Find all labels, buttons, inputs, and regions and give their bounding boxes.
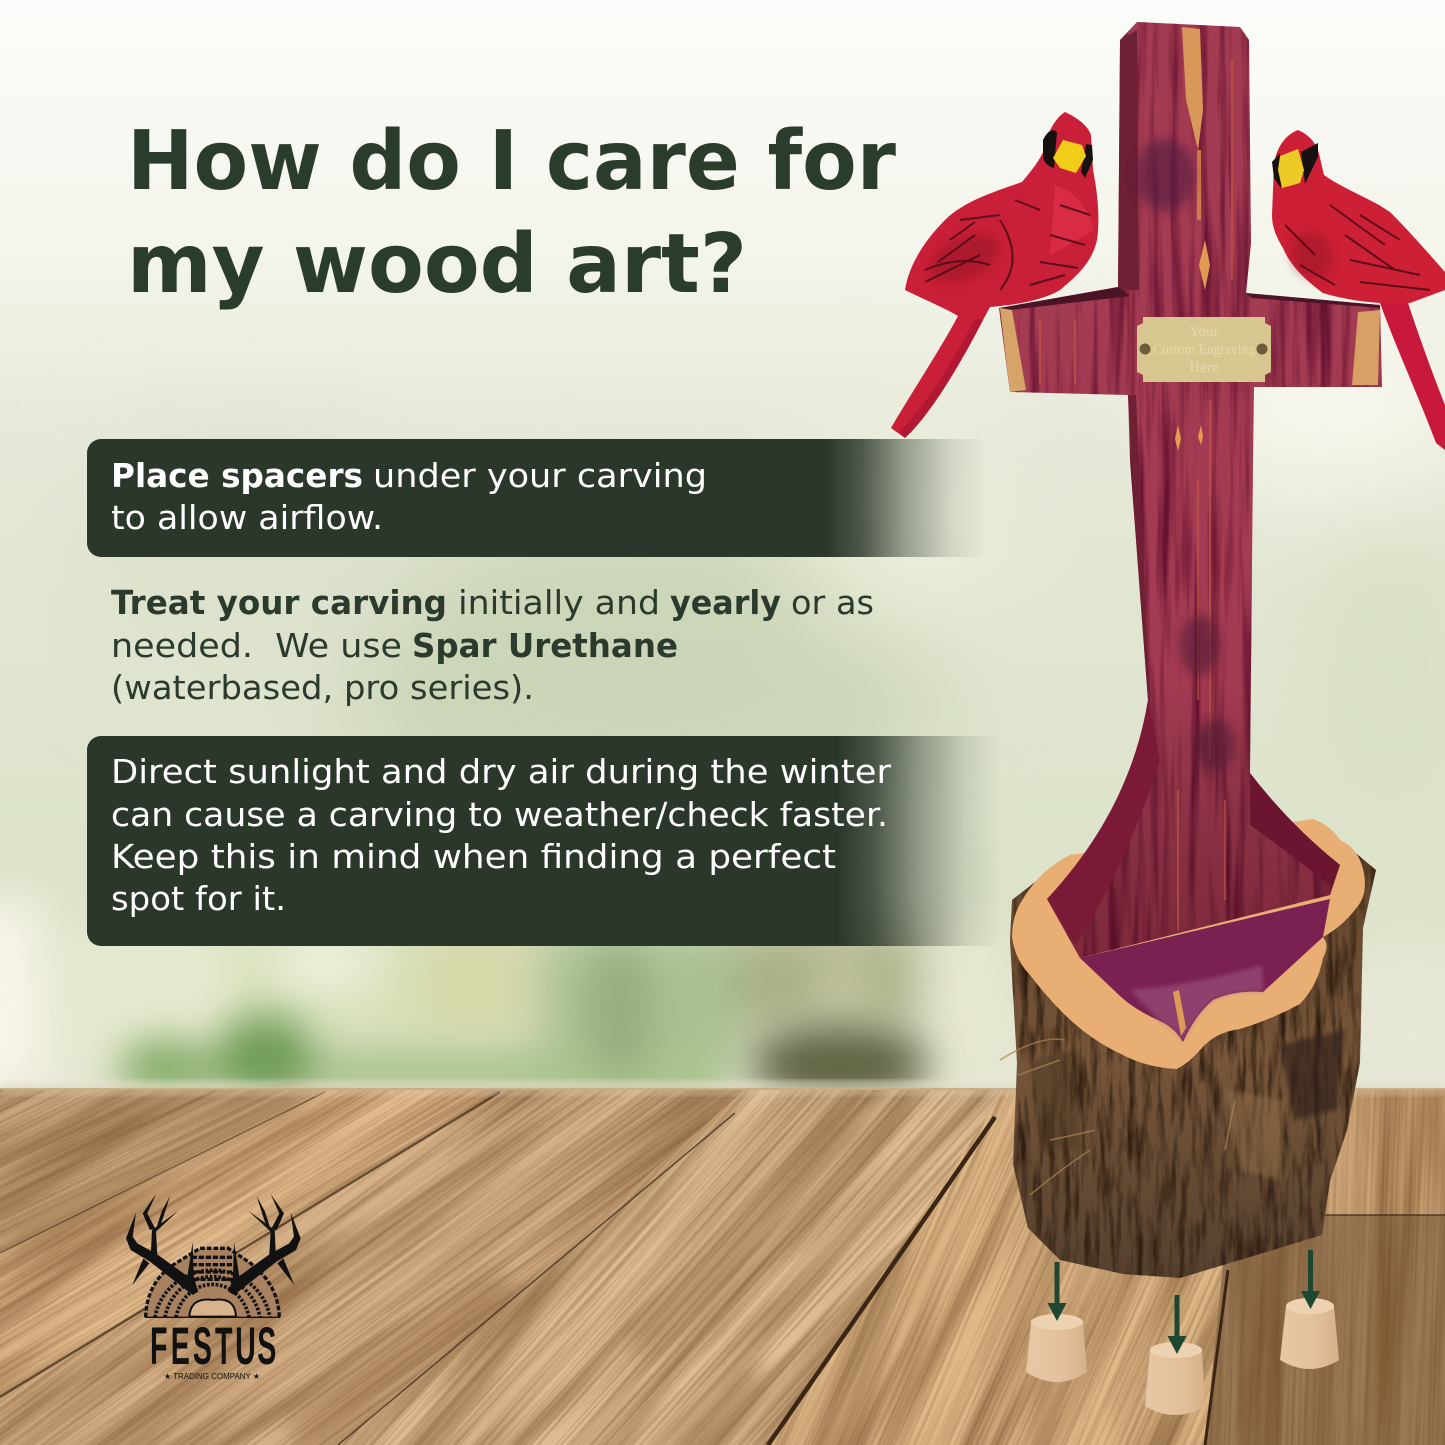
title: How do I care for [127,114,897,209]
plank 3 [0,1090,745,1445]
logo: Festus Trading Company: ★ TRADING COMPANY ★ [164,1372,260,1381]
text block: treat your carving: yearly [670,583,781,622]
text block: treat your carving: Treat your carving [111,583,447,622]
panel: direct sunlight [87,736,1002,946]
brass plaque [1137,317,1271,382]
text block: treat your carving: (waterbased, pro series). [111,668,534,707]
spacer cork: left [1026,1314,1087,1382]
arrow: left [1048,1262,1066,1321]
purple lower seat [1080,899,1330,1042]
panel: direct sunlight: spot for it. [111,879,286,918]
trunk bark [1010,840,1376,1278]
background: blurred garden [0,0,1445,1105]
brass plaque: Custom Engraving [1153,342,1255,358]
logo: Festus Trading Company [126,1194,301,1381]
plank 6 [1205,1215,1445,1445]
spacer cork: middle [1145,1342,1205,1415]
title [127,114,897,312]
panel: direct sunlight: Direct sunlight and dry air during the winter [111,752,891,791]
arrow: middle [1168,1295,1186,1354]
spacer cork: right [1280,1298,1339,1369]
cedar stump [1000,819,1390,1290]
panel: place spacers: Place spacers [111,456,363,495]
text block: treat your carving: needed. We use [111,626,402,665]
plank 7 [1228,1090,1445,1215]
panel: direct sunlight: Keep this in mind when finding a perfect [111,837,836,876]
text block: treat your carving: initially and [458,583,660,622]
plank 1 [0,1090,325,1253]
arrow: right [1301,1250,1320,1309]
tree ring rim [1012,819,1365,1069]
text block: treat your carving [111,583,874,707]
plank 5 [768,1090,1340,1445]
logo mark: antlers and log [126,1194,301,1317]
logo: Festus Trading Company: FESTUS [150,1317,276,1375]
wood cross [990,15,1390,1042]
panel: direct sunlight: can cause a carving to weather/check faster. [111,795,888,834]
plank 4 [338,1090,1005,1445]
panel: place spacers: under your carving [373,456,707,495]
beak and mask [1272,143,1318,188]
text block: treat your carving: or as [791,583,874,622]
plank 2 [0,1090,500,1397]
title: my wood art? [127,217,747,312]
panel: place spacers: to allow airflow. [111,498,383,537]
brass plaque: Here [1189,360,1219,376]
cardinal: right [1272,130,1445,450]
wooden table top [0,1086,1445,1445]
text block: treat your carving: Spar Urethane [412,626,678,665]
panel: place spacers [87,439,988,557]
cardinal: left [891,112,1098,438]
brass plaque: Your [1189,324,1219,340]
beak and mask [1043,130,1093,178]
